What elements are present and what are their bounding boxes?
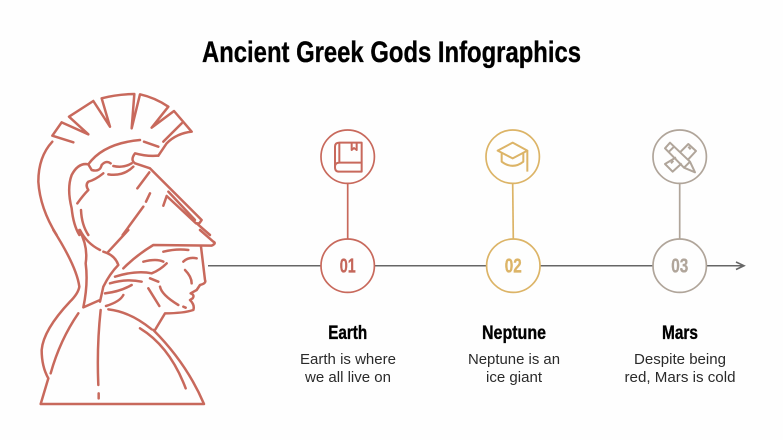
panel: Earth step [321, 130, 374, 292]
bust and face [41, 230, 215, 404]
panel: Mars step [653, 130, 706, 292]
timeline arrow [208, 262, 744, 270]
icon: pencil and ruler [653, 130, 706, 183]
text block: Neptune [468, 323, 560, 386]
text block: Earth: Earth [328, 323, 367, 344]
icon: book [321, 130, 374, 183]
connector [347, 184, 349, 239]
text block: Mars: red, Mars is cold [624, 370, 736, 386]
number circle 02: 02 [505, 256, 522, 278]
text block: Mars [624, 323, 736, 386]
number circle 01: 01 [340, 256, 356, 278]
title: Ancient Greek Gods Infographics [202, 36, 581, 69]
icon: graduation cap [486, 130, 539, 183]
number circle 03: 03 [671, 256, 688, 278]
number circle 02 [487, 239, 540, 292]
text block: Earth: Earth is where [300, 352, 396, 368]
connector [512, 184, 514, 239]
icon: Greek warrior helmet bust [38, 94, 215, 404]
text block: Neptune: Neptune is an [468, 352, 560, 368]
panel: Neptune step [486, 130, 540, 292]
text block: Mars: Despite being [634, 352, 726, 368]
connector [679, 184, 681, 239]
number circle 01 [321, 239, 374, 292]
text block: Neptune: Neptune [482, 323, 546, 344]
helmet and crest [38, 94, 210, 235]
text block: Earth: we all live on [304, 370, 391, 386]
text block: Mars: Mars [662, 323, 698, 344]
text block: Earth [300, 323, 396, 386]
number circle 03 [653, 239, 706, 292]
text block: Neptune: ice giant [486, 370, 542, 386]
